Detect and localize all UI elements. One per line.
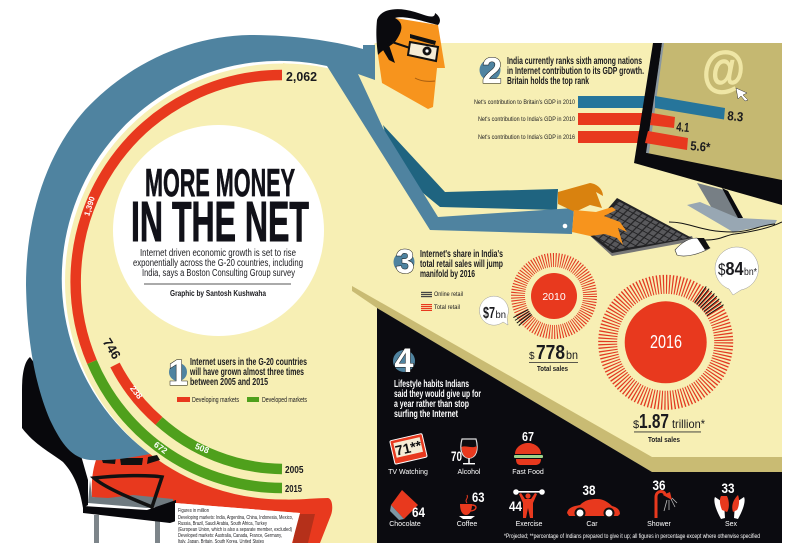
section 3: retail heading and legend <box>394 243 503 311</box>
icon: exercise: Exercise <box>516 521 543 528</box>
icon: coffee <box>457 492 484 526</box>
section 3: retail heading and legend: manifold by 2016 <box>420 269 475 280</box>
icon: shower: 36 <box>652 477 666 493</box>
icon: chocolate: Chocolate <box>389 521 421 528</box>
chart: net contribution to GDP: 5.6* <box>690 138 712 155</box>
hands on keyboard <box>558 183 627 245</box>
section 2: GDP heading: Britain holds the top rank <box>507 76 589 87</box>
chart: internet users arcs <box>76 75 282 488</box>
icon: TV watching <box>388 433 428 476</box>
total sales 2016: 1.87 <box>639 411 669 433</box>
section 4: lifestyle heading: Lifestyle habits Indians <box>394 379 469 390</box>
callout: $84bn: bn* <box>744 267 757 278</box>
section 1: internet users <box>169 358 307 404</box>
section 1: internet users: between 2005 and 2015 <box>190 377 268 388</box>
chart: net contribution to GDP: Net's contribution to India's GDP in 2016 <box>478 134 575 141</box>
section 3: retail heading and legend: Internet's share in India's <box>420 249 503 260</box>
subtitle: India, says a Boston Consulting Group survey <box>142 268 295 279</box>
chart: net contribution to GDP: 4.1 <box>676 119 690 135</box>
black lifestyle panel with tan edge <box>352 286 782 543</box>
mouse and cables <box>669 222 782 256</box>
chart: net contribution to GDP: 8.3 <box>727 108 744 124</box>
section 2: GDP heading: 2 <box>482 50 502 91</box>
chart: 2010 retail burst <box>479 260 590 373</box>
footnote panel: figures in million: Figures in million <box>178 508 209 514</box>
icon: fast food: Fast Food <box>512 469 544 476</box>
footnote panel: figures in million: Developed markets: Australia, Canada, France, Germany, <box>178 533 282 539</box>
section 3: retail heading and legend: Total retail <box>434 304 460 311</box>
arc value labels: 508 <box>194 441 211 456</box>
section 1: internet users: Developed markets <box>262 397 307 404</box>
icon: car <box>567 486 620 526</box>
chart: 2010 retail burst: 2010 <box>542 291 566 303</box>
total sales 2016: trillion* <box>672 417 705 431</box>
section 4: lifestyle heading: said they would give up for <box>394 389 481 400</box>
red trousers <box>92 454 332 543</box>
subtitle: exponentially across the G-20 countries, including <box>133 258 303 269</box>
total sales 2010: $ <box>529 351 535 362</box>
icon: exercise: 44 <box>509 498 522 514</box>
monitor flat chart bars behind frame <box>578 96 645 143</box>
arc value labels: 746 <box>100 335 124 362</box>
section 2: GDP heading: India currently ranks sixth among nations <box>507 56 642 67</box>
arc value labels: 2,062 <box>286 69 317 84</box>
section 3: retail heading and legend: total retail sales will jump <box>420 259 503 270</box>
icon: coffee: 63 <box>472 489 485 505</box>
blue body and front arm <box>26 35 574 460</box>
arc value labels: 2005 <box>285 465 304 476</box>
section 2: GDP heading: in Internet contribution to its GDP growth. <box>507 66 644 77</box>
footnote panel: figures in million: Italy, Japan, Britain, South Korea, United States <box>178 539 264 545</box>
callout: $7bn: bn <box>496 310 506 321</box>
total sales 2010: Total sales <box>537 364 568 373</box>
chart: 2016 retail burst: 2016 <box>650 332 682 352</box>
section 2: GDP heading <box>480 56 644 86</box>
icon: feet: 33 <box>722 480 735 496</box>
icon: TV watching: TV Watching <box>388 469 428 476</box>
callout: $84bn: $ <box>718 260 726 279</box>
total sales 2016: $ <box>633 419 639 431</box>
section 4: lifestyle heading: 4 <box>395 342 414 380</box>
title circle <box>113 125 324 336</box>
arc value labels: 238 <box>128 383 145 401</box>
head with glasses <box>376 9 445 109</box>
callout: $84bn: 84 <box>726 259 744 279</box>
keyboard <box>590 198 693 256</box>
arc value labels: 1,390 <box>82 195 97 217</box>
icon: chocolate: 64 <box>412 504 425 520</box>
footnote panel: figures in million <box>175 503 300 545</box>
total sales 2010: bn <box>566 348 578 362</box>
title: IN THE NET <box>131 190 309 254</box>
title: MORE MONEY <box>145 162 295 205</box>
icon: alcohol: Alcohol <box>458 469 481 476</box>
icon: alcohol: 70 <box>451 448 462 464</box>
section 4: lifestyle heading: surfing the Internet <box>394 409 458 420</box>
icon: fast food: 67 <box>522 429 534 444</box>
section 1: internet users: will have grown almost three times <box>189 367 304 378</box>
icon: coffee: Coffee <box>457 521 477 528</box>
icon: shower <box>648 480 678 526</box>
computer monitor <box>634 43 782 232</box>
section 1: internet users: Internet users in the G-20 countries <box>190 357 307 368</box>
section 1: internet users: 1 <box>168 352 188 393</box>
total sales 2010 <box>529 345 578 371</box>
icon: car: Car <box>586 521 598 528</box>
icon: chocolate <box>389 490 425 528</box>
total sales 2016 <box>633 414 705 442</box>
arc value labels: 672 <box>152 439 170 456</box>
icon: TV watching: 71** <box>394 437 423 459</box>
chair seat and armrest <box>83 476 176 523</box>
callout: $7bn <box>479 296 508 325</box>
byline: Graphic by Santosh Kushwaha <box>170 288 266 298</box>
total sales 2016: Total sales <box>648 435 680 444</box>
chair back and seat <box>22 357 160 545</box>
subtitle: Internet driven economic growth is set to rise <box>140 248 296 259</box>
section 4: lifestyle heading <box>393 342 481 420</box>
icon: shower: Shower <box>647 521 672 528</box>
section 4: lifestyle heading: a year rather than stop <box>394 399 469 410</box>
section 1: internet users: Developing markets <box>192 397 239 404</box>
section 3: retail heading and legend: 3 <box>396 243 414 281</box>
arc value labels <box>82 69 317 495</box>
icon: exercise <box>509 489 545 528</box>
callout: $84bn <box>715 247 758 295</box>
footnote panel: figures in million: Russia, Brazil, Saudi Arabia, South Africa, Turkey <box>178 521 267 527</box>
chart: net contribution to GDP <box>474 96 744 155</box>
arc value labels: 2015 <box>285 484 302 495</box>
callout: $7bn: $7 <box>483 305 495 322</box>
chart: 2016 retail burst <box>608 247 758 444</box>
icon: car: 38 <box>582 482 596 498</box>
dark rear arm <box>383 125 558 210</box>
icon: feet <box>714 480 745 528</box>
footnote panel: figures in million: Developing markets: India, Argentina, China, Indonesia, Mexico, <box>178 515 293 521</box>
icon: feet: Sex <box>725 521 738 528</box>
subtitle <box>133 248 303 279</box>
chart: net contribution to GDP: Net's contribution to Britain's GDP in 2010 <box>474 99 575 106</box>
icon: alcohol <box>451 439 481 476</box>
footnote panel: figures in million: (European Union, which is also a separate member, excluded) <box>178 527 292 533</box>
icon: fast food <box>512 432 544 474</box>
icon: at sign and cursor: @ <box>702 41 745 97</box>
section 3: retail heading and legend: Online retail <box>434 291 463 298</box>
chart: net contribution to GDP: Net's contribution to India's GDP in 2010 <box>478 116 575 123</box>
total sales 2010: 778 <box>536 342 565 364</box>
title <box>132 168 309 242</box>
